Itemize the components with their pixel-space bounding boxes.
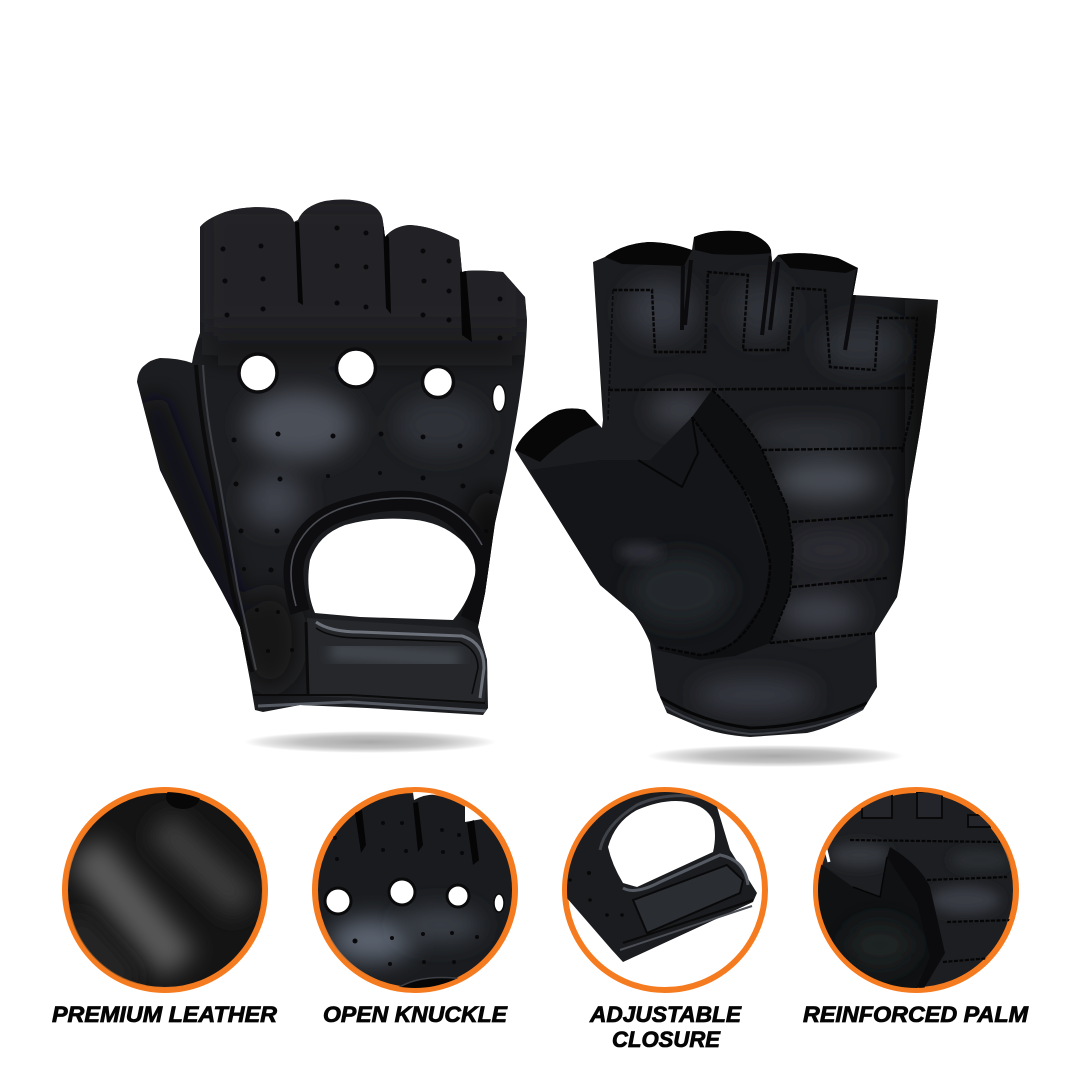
pad border (887, 847, 945, 990)
pad border band (657, 390, 793, 660)
feature: reinforced palm (803, 790, 1029, 1027)
right glove ground shadow (647, 745, 903, 767)
rib stitches (762, 448, 905, 643)
label: PREMIUM LEATHER (52, 1002, 277, 1027)
palm shading (625, 280, 945, 713)
feature: premium leather (52, 785, 277, 1027)
closure opening (308, 519, 475, 620)
sheen (330, 918, 414, 962)
stitched finger panel (613, 272, 917, 453)
thumb seam (196, 365, 252, 672)
label: REINFORCED PALM (803, 1002, 1029, 1027)
left glove ground shadow (244, 731, 496, 753)
cuff hem (660, 697, 867, 728)
fingertip openings (515, 231, 858, 462)
palm pad (815, 857, 930, 995)
finger seams (682, 256, 858, 350)
knuckle holes (239, 349, 506, 412)
strap body (306, 618, 488, 704)
leather sheen (85, 850, 180, 965)
sheen (930, 886, 1000, 914)
feature: adjustable closure (560, 787, 765, 1052)
rib stitches (850, 840, 1013, 962)
knuckle holes (325, 879, 504, 914)
leather shading (150, 200, 530, 690)
finger panels (862, 792, 990, 827)
thumb crease (638, 417, 698, 487)
strap flap (633, 865, 743, 933)
finger gaps (412, 792, 482, 822)
perforations (220, 226, 502, 653)
finger notches (295, 222, 472, 342)
feature: adjustable closure: CLOSURE (612, 1027, 721, 1052)
closure opening (608, 801, 715, 887)
opening rim (293, 501, 482, 620)
label: OPEN KNUCKLE (323, 1002, 508, 1027)
label: ADJUSTABLE (589, 1002, 742, 1027)
band stitch (608, 388, 912, 390)
palm pad (544, 418, 707, 632)
left glove: perforated back view (137, 200, 530, 715)
right glove: palm view (515, 231, 945, 737)
feature: open knuckle (315, 780, 515, 1027)
glove crop (560, 787, 757, 962)
